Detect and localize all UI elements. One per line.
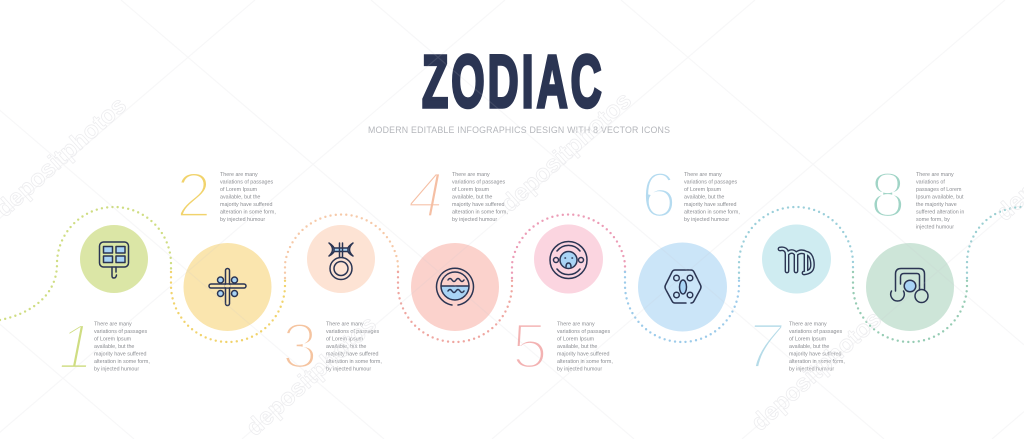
step 6 — [638, 159, 740, 332]
circle 8 — [866, 243, 954, 331]
text block 8: Ipsum available, but — [916, 194, 964, 200]
stock photo watermark: depositphotos — [496, 87, 637, 217]
text block 1: variations of passages — [94, 329, 147, 335]
circle 3 — [307, 225, 375, 293]
step 4 — [408, 159, 508, 331]
text block 7: variations of passages — [789, 329, 842, 335]
number 3: 3 — [282, 310, 318, 382]
text block 4: by injected humour — [452, 217, 497, 223]
number 5: 5 — [512, 310, 548, 382]
text block 6: alteration in some form, — [684, 210, 740, 216]
step 5 — [512, 224, 613, 382]
text block 5: variations of passages — [557, 329, 610, 335]
text block 5: available, but the — [557, 344, 597, 350]
number 8: 8 — [870, 159, 906, 231]
icon: water in a ring — [437, 268, 474, 305]
circle 2 — [184, 243, 272, 331]
text block 2: majority have suffered — [220, 202, 273, 208]
step 1 — [58, 225, 150, 382]
text block 2: There are many — [220, 172, 258, 178]
stock photo watermark: depositphotos — [241, 311, 382, 439]
number 6: 6 — [641, 159, 677, 231]
text block 5: of Lorem Ipsum — [557, 336, 595, 342]
text block 7: majority have suffered — [789, 352, 842, 358]
text block 3: available, but the — [326, 344, 366, 350]
step 7 — [746, 224, 845, 382]
text block 2: by injected humour — [220, 217, 265, 223]
text block 5: There are many — [557, 322, 595, 328]
text block 7: of Lorem Ipsum — [789, 336, 827, 342]
title: ZODIAC — [422, 40, 605, 123]
circle 7 — [762, 224, 831, 294]
text block 7: alteration in some form, — [789, 359, 845, 365]
icon: cross with four dots — [209, 268, 246, 306]
text block 5: by injected humour — [557, 366, 602, 372]
step 8 — [866, 159, 964, 331]
icon: window grid sign — [100, 242, 128, 278]
text block 2: alteration in some form, — [220, 210, 276, 216]
number 2: 2 — [176, 159, 212, 231]
text block 8: injected humour — [916, 224, 954, 230]
text block 4: majority have suffered — [452, 202, 505, 208]
circle 6 — [638, 242, 727, 332]
text block 1: There are many — [94, 322, 132, 328]
step 3 — [282, 225, 382, 382]
text block 4: alteration in some form, — [452, 210, 508, 216]
text block 8: passages of Lorem — [916, 187, 962, 193]
text block 8: variations of — [916, 180, 945, 186]
text block 8: the majority have — [916, 202, 957, 208]
text block 4: of Lorem Ipsum — [452, 187, 490, 193]
text block 8: suffered alteration in — [916, 210, 964, 216]
text block 6: variations of passages — [684, 180, 737, 186]
circle 5 — [534, 224, 603, 294]
text block 4: variations of passages — [452, 180, 505, 186]
text block 5: majority have suffered — [557, 352, 610, 358]
text block 6: of Lorem Ipsum — [684, 187, 722, 193]
text block 2: of Lorem Ipsum — [220, 187, 258, 193]
text block 8: There are many — [916, 172, 954, 178]
text block 7: available, but the — [789, 344, 829, 350]
dotted timeline path — [0, 207, 1024, 342]
number 7: 7 — [746, 310, 784, 382]
text block 7: by injected humour — [789, 366, 834, 372]
text block 2: available, but the — [220, 194, 260, 200]
text block 1: available, but the — [94, 344, 134, 350]
icon: face with orbit — [550, 242, 587, 278]
icon: uranus symbol — [329, 243, 353, 280]
number 4: 4 — [408, 159, 444, 231]
icon: hexagon with dots — [665, 270, 701, 303]
number 1: 1 — [58, 310, 94, 382]
circle 1 — [80, 225, 148, 293]
step 2 — [176, 159, 276, 331]
text block 2: variations of passages — [220, 180, 273, 186]
text block 1: majority have suffered — [94, 352, 147, 358]
text block 3: There are many — [326, 322, 364, 328]
text block 3: majority have suffered — [326, 352, 379, 358]
stock photo watermark: depositphotos — [746, 306, 887, 436]
text block 3: variations of passages — [326, 329, 379, 335]
text block 8: some form, by — [916, 217, 950, 223]
text block 6: majority have suffered — [684, 202, 737, 208]
text block 6: by injected humour — [684, 217, 729, 223]
text block 6: available, but the — [684, 194, 724, 200]
text block 5: alteration in some form, — [557, 359, 613, 365]
text block 3: alteration in some form, — [326, 359, 382, 365]
text block 3: of Lorem Ipsum — [326, 336, 364, 342]
text block 1: of Lorem Ipsum — [94, 336, 132, 342]
icon: arch with two loops — [891, 268, 928, 302]
text block 4: available, but the — [452, 194, 492, 200]
subtitle: MODERN EDITABLE INFOGRAPHICS DESIGN WITH 8 VECTOR ICONS — [368, 125, 670, 135]
text block 4: There are many — [452, 172, 490, 178]
text block 7: There are many — [789, 322, 827, 328]
text block 1: alteration in some form, — [94, 359, 150, 365]
text block 1: by injected humour — [94, 366, 139, 372]
text block 3: by injected humour — [326, 366, 371, 372]
text block 6: There are many — [684, 172, 722, 178]
circle 4 — [411, 243, 499, 331]
icon: virgo symbol — [780, 249, 812, 273]
